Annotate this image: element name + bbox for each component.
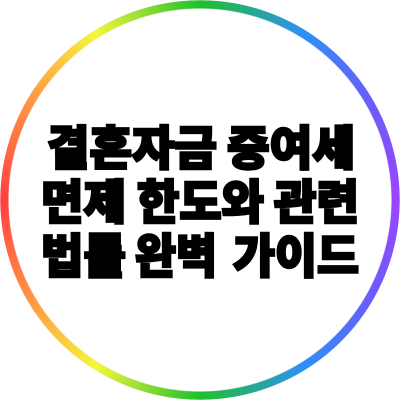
title line 1	[47, 122, 355, 175]
title line 2: 한도와	[137, 176, 264, 229]
title line 2: 면제	[41, 176, 126, 229]
title line 2	[41, 176, 359, 229]
title line 2: 관련	[274, 176, 359, 229]
title line 3: 법률	[41, 230, 126, 283]
title line 3: 완벽	[135, 230, 217, 283]
title line 3	[41, 230, 359, 283]
title line 1: 증여세	[227, 122, 355, 175]
title line 3: 가이드	[233, 230, 359, 283]
title line 1: 결혼자금	[47, 122, 217, 175]
